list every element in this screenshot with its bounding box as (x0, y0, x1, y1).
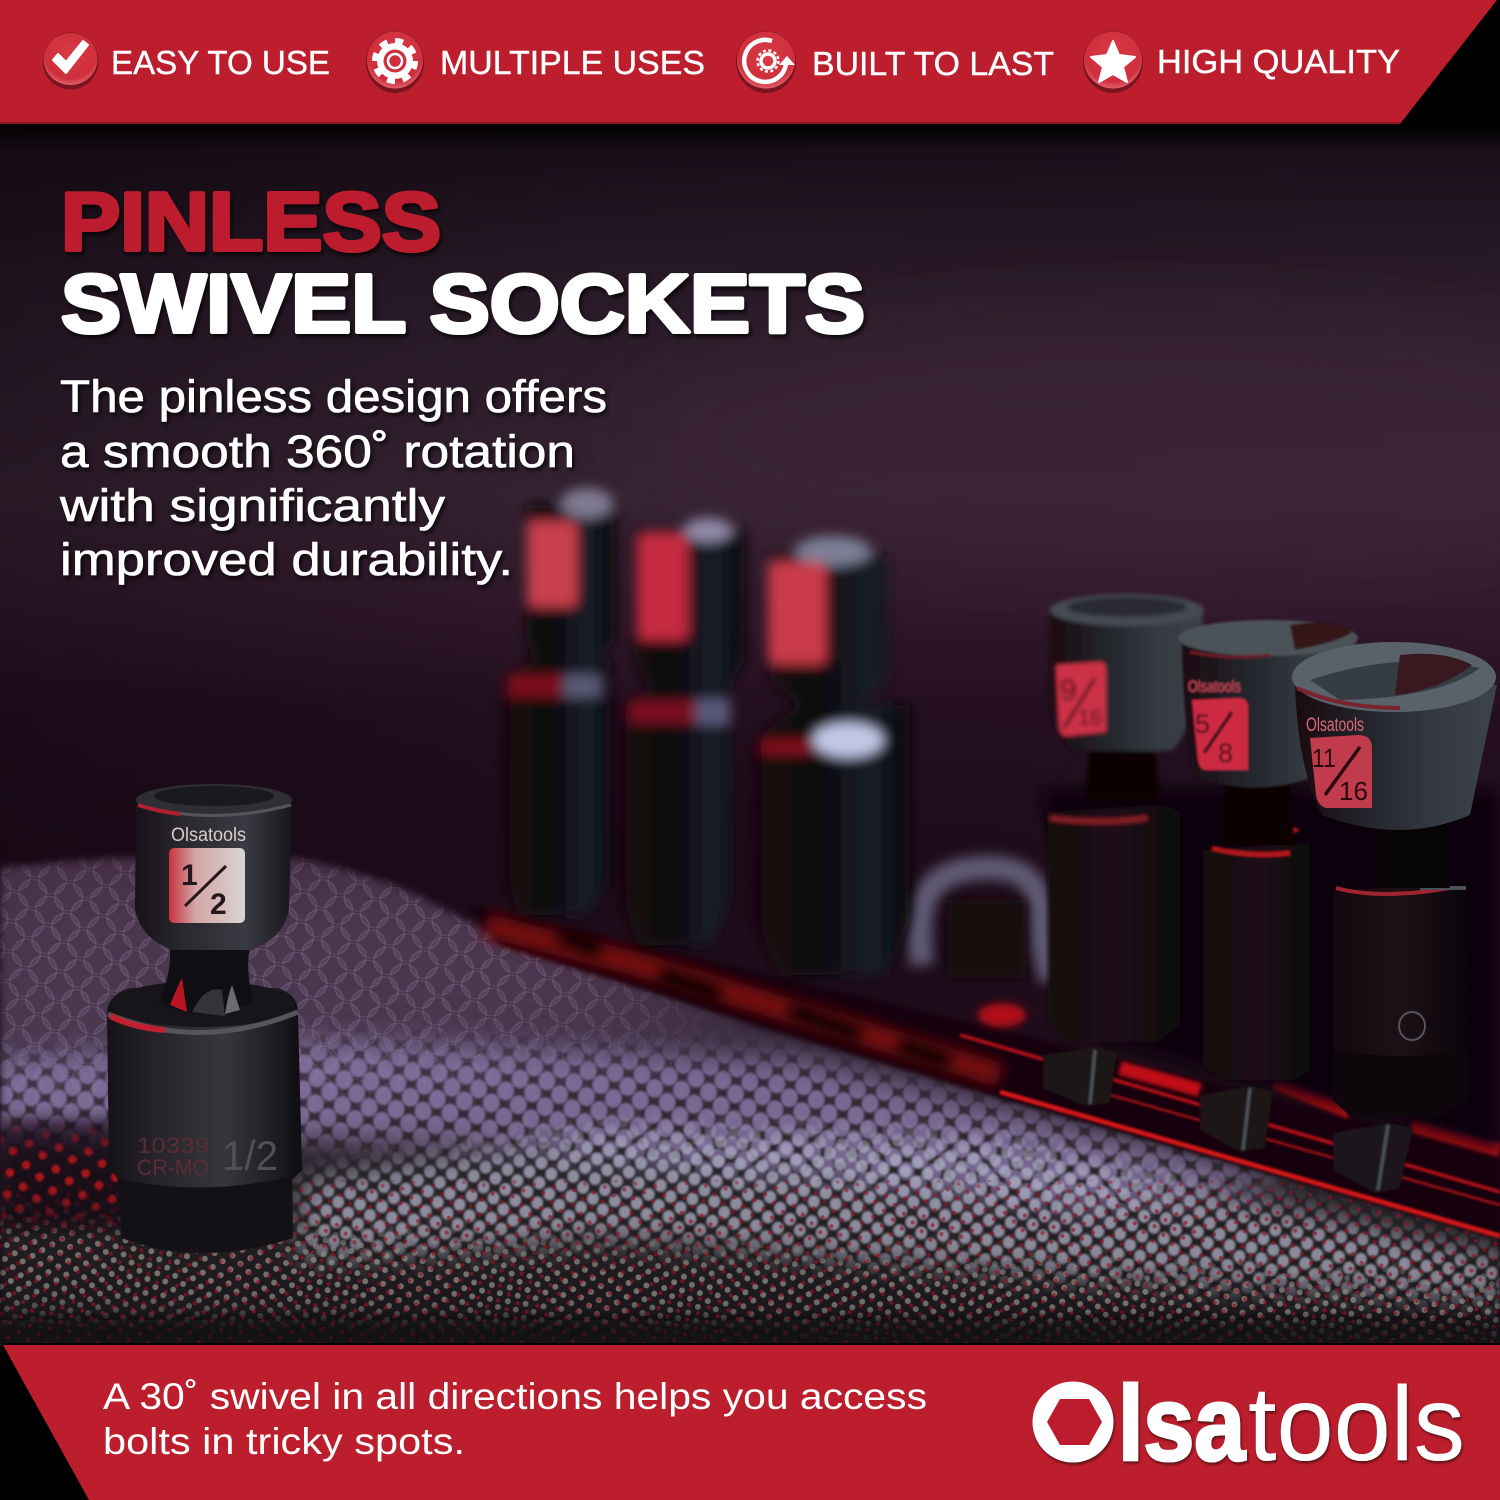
socket 5/8: 5 (1195, 709, 1210, 739)
socket brand mark: Olsatools (171, 825, 246, 846)
socket 11/16: Olsatools (1306, 715, 1364, 736)
description text: with significantly (59, 480, 446, 531)
embossed markings: 10339 (137, 1133, 209, 1158)
icon: check mark (42, 32, 98, 90)
size tag 1/2: 2 (210, 888, 227, 921)
size tag 1/2: 1 (181, 859, 198, 892)
logo: olsatools: O (1033, 1363, 1113, 1484)
foreground socket 1/2 (107, 784, 302, 1253)
background socket 1 (504, 488, 615, 915)
background socket 2 (619, 518, 745, 945)
footer text: bolts in tricky spots. (103, 1421, 465, 1462)
blurred chain in background (920, 868, 1052, 980)
icon: gear (366, 31, 424, 93)
description text (59, 371, 607, 585)
logo: olsatools (1032, 1363, 1465, 1484)
socket 5/8: 8 (1218, 738, 1233, 768)
foreground socket 1/2: CR-MO (137, 1155, 209, 1180)
description text: a smooth 360˚ rotation (60, 426, 575, 477)
rail clips (1043, 1047, 1413, 1193)
logo: olsatools: lsa (1118, 1365, 1246, 1483)
footer text: A 30˚ swivel in all directions helps you access (103, 1376, 927, 1417)
title (61, 175, 865, 350)
top banner (0, 0, 1497, 124)
label: easy to use: EASY TO USE (111, 44, 330, 81)
dark mass behind front sockets (1040, 790, 1500, 1150)
socket 11/16 (1292, 642, 1497, 1118)
label: multiple uses: MULTIPLE USES (440, 44, 705, 81)
bottom banner (3, 1344, 1500, 1500)
heading: swivel sockets: SWIVEL SOCKETS (61, 257, 865, 350)
socket 5/8 (1178, 620, 1358, 1080)
label: built to last: BUILT TO LAST (812, 45, 1054, 82)
footer text (103, 1376, 927, 1462)
icon: star (1083, 31, 1143, 93)
socket 9/16: 9 (1060, 674, 1077, 707)
label: high quality: HIGH QUALITY (1157, 43, 1400, 80)
logo: olsatools: tools (1248, 1365, 1465, 1483)
size tag 1/2 (169, 848, 245, 923)
socket 9/16 (1048, 594, 1204, 1042)
description text: The pinless design offers (60, 371, 607, 422)
heading: pinless: PINLESS (61, 175, 441, 268)
red socket rail (470, 905, 1500, 1238)
description text: improved durability. (60, 534, 513, 585)
background socket 3 (753, 536, 910, 975)
socket 11/16: 16 (1339, 776, 1368, 806)
socket 9/16: 16 (1078, 705, 1102, 730)
fabric mat with bokeh weave (0, 840, 1500, 1350)
socket 11/16: 11 (1312, 743, 1336, 773)
foreground socket 1/2: 1/2 (222, 1132, 278, 1179)
icon: gear with arrow (736, 31, 796, 93)
socket 5/8: Olsatools (1188, 677, 1241, 696)
